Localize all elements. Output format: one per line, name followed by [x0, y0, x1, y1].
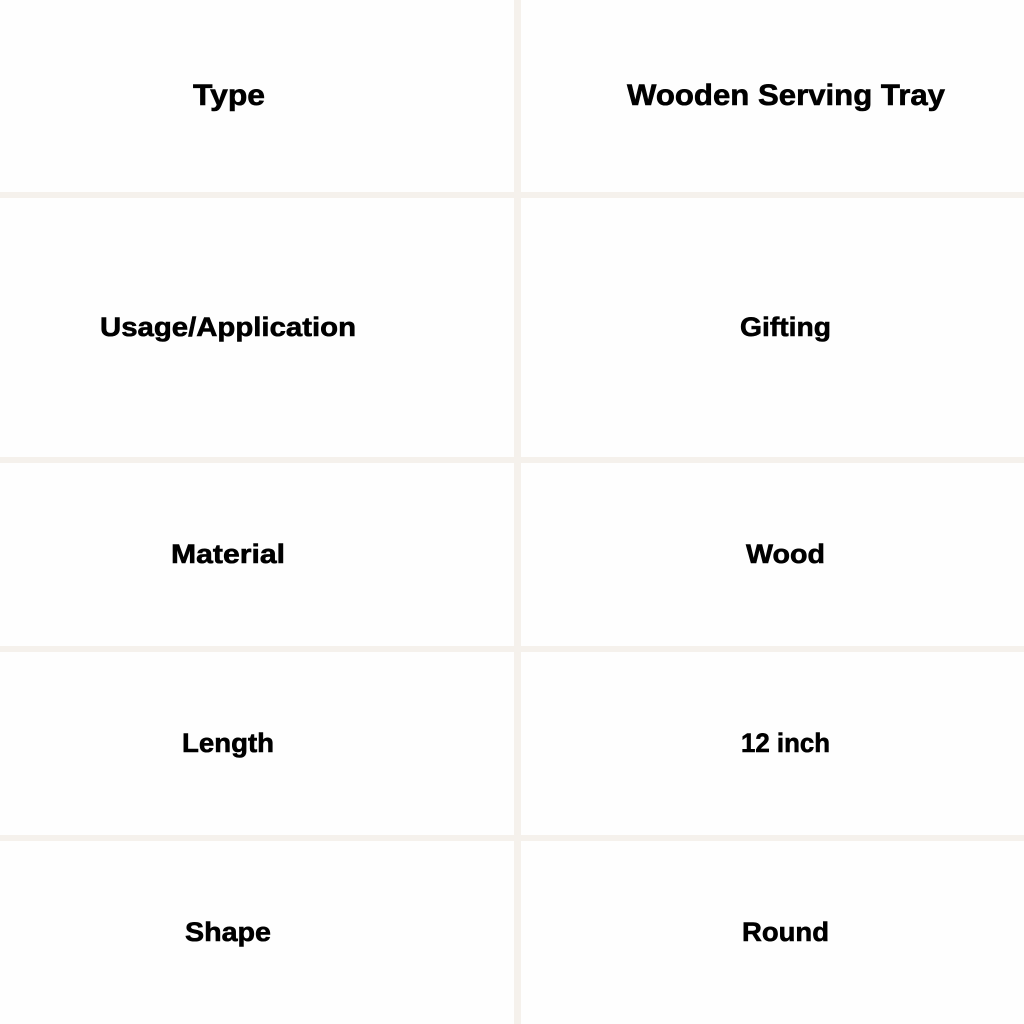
- row label: Material: Material: [171, 539, 285, 569]
- row value: Wooden Serving Tray: Wooden Serving Tray: [627, 79, 945, 112]
- row value: Gifting: Gifting: [740, 312, 831, 342]
- row value: 12 inch: 12 inch: [741, 728, 830, 758]
- row label: Type: Type: [193, 79, 265, 112]
- row value: Wood: Wood: [746, 539, 825, 569]
- row label: Shape: Shape: [185, 917, 271, 947]
- row label: Length: Length: [182, 728, 274, 758]
- row label: Usage/Application: Usage/Application: [100, 312, 356, 342]
- row value: Round: Round: [742, 917, 829, 947]
